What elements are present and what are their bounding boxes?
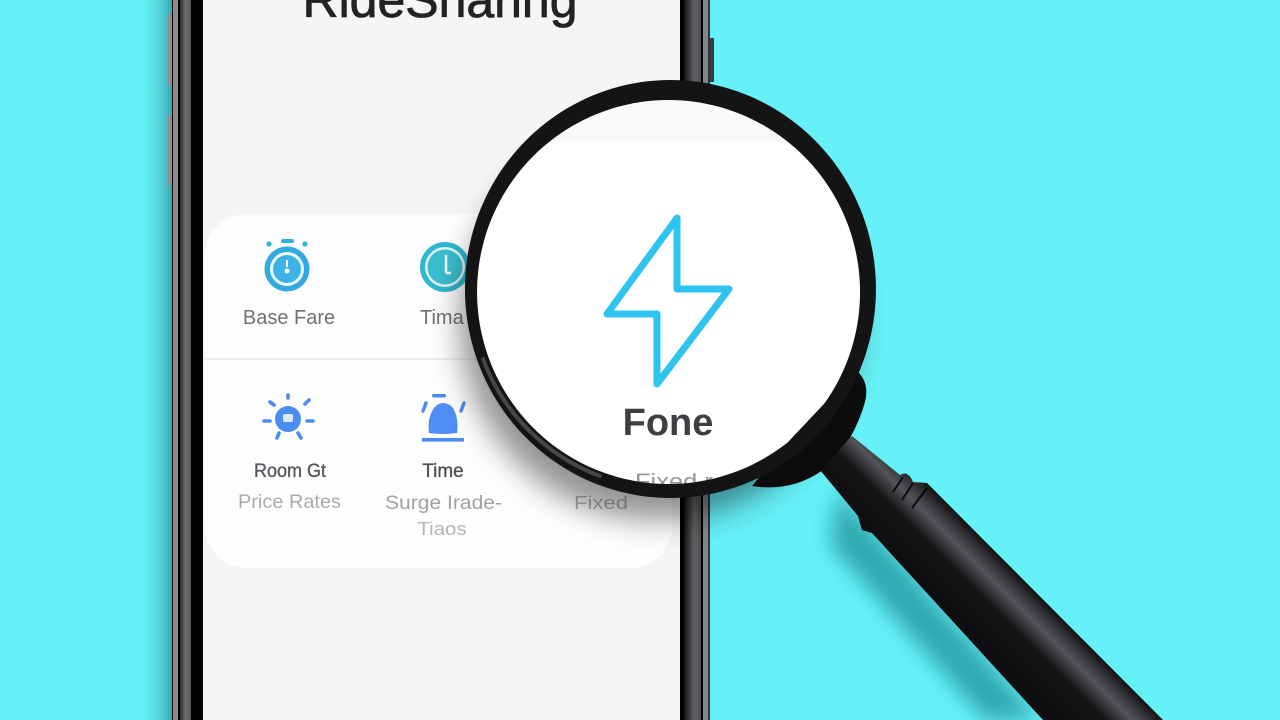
lens label: Fone [623, 402, 713, 444]
lens rim [465, 80, 876, 498]
rim highlight [482, 358, 601, 476]
phone [168, 0, 714, 720]
lens sublabel: Fixed ra [635, 469, 728, 494]
phone side buttons [168, 14, 714, 185]
icon: lightning bolt [607, 218, 729, 384]
phone body [172, 0, 710, 720]
label: Base Fare [243, 307, 335, 329]
fare card [205, 214, 672, 568]
label: Tima [420, 307, 465, 329]
sublabel: Price Rates [238, 492, 341, 513]
handle shadow [830, 490, 1040, 720]
label: Room Gt [254, 461, 327, 482]
item: time [420, 242, 470, 329]
item: room [238, 395, 341, 513]
handle [820, 436, 1163, 720]
icon: sun [264, 395, 313, 438]
lens glass [472, 93, 866, 487]
label: Time [422, 461, 464, 482]
infographic scene [147, 0, 1163, 720]
lens shadow [460, 124, 856, 520]
magnifying glass [465, 80, 1163, 720]
phone left shadow [142, 0, 172, 720]
item: base fare [243, 239, 335, 329]
phone screen [203, 0, 680, 720]
icon: alarm bell [422, 394, 464, 442]
item: surge: Tiaos [418, 519, 466, 539]
third column fragment: Fixed [574, 493, 628, 513]
icon: stopwatch [264, 239, 310, 292]
item: surge [385, 394, 502, 539]
icon: clock [420, 242, 470, 292]
shadows [460, 124, 1040, 720]
lens collar [752, 370, 866, 487]
sublabel: Surge Irade- [385, 493, 502, 514]
lens upper tint [470, 95, 870, 143]
